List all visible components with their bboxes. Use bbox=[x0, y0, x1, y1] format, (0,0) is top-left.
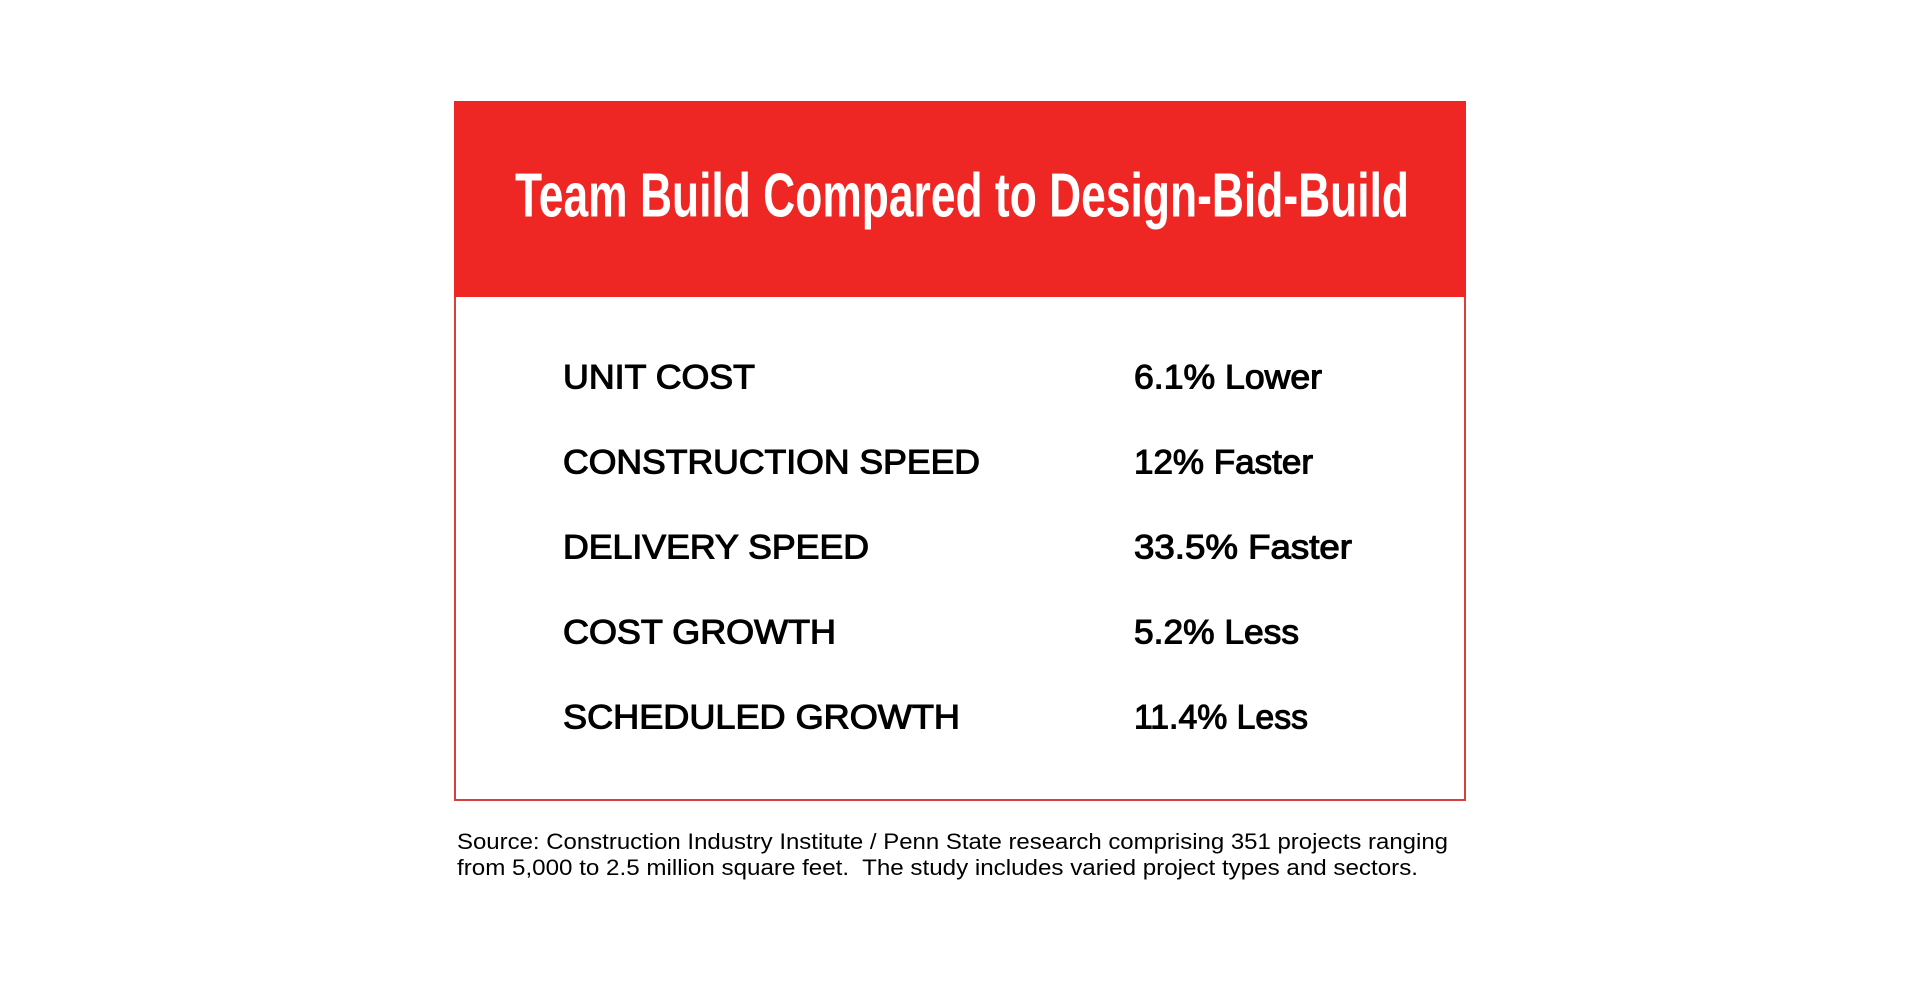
row: delivery speed: 33.5% Faster bbox=[1134, 528, 1352, 566]
panel: comparison table bbox=[454, 101, 1466, 800]
row: construction speed bbox=[563, 444, 1313, 482]
row: cost growth: COST GROWTH bbox=[563, 614, 836, 652]
row: delivery speed: DELIVERY SPEED bbox=[563, 528, 869, 566]
title: Team Build Compared to Design-Bid-Build bbox=[515, 162, 1409, 230]
row: unit cost bbox=[563, 358, 1322, 396]
row: construction speed: CONSTRUCTION SPEED bbox=[563, 444, 980, 482]
row: scheduled growth: SCHEDULED GROWTH bbox=[563, 698, 960, 736]
header band bbox=[454, 101, 1466, 297]
source note bbox=[457, 829, 1448, 880]
source note: from 5,000 to 2.5 million square feet. The study includes varied project types and sectors. bbox=[457, 855, 1418, 880]
row: scheduled growth bbox=[563, 698, 1308, 736]
row: unit cost: UNIT COST bbox=[563, 358, 755, 396]
row: cost growth: 5.2% Less bbox=[1134, 614, 1299, 652]
row: construction speed: 12% Faster bbox=[1134, 444, 1313, 482]
row: scheduled growth: 11.4% Less bbox=[1134, 698, 1308, 736]
source note: Source: Construction Industry Institute / Penn State research comprising 351 projects ranging bbox=[457, 829, 1448, 854]
row: delivery speed bbox=[563, 528, 1352, 566]
row: cost growth bbox=[563, 614, 1299, 652]
row: unit cost: 6.1% Lower bbox=[1134, 358, 1322, 396]
